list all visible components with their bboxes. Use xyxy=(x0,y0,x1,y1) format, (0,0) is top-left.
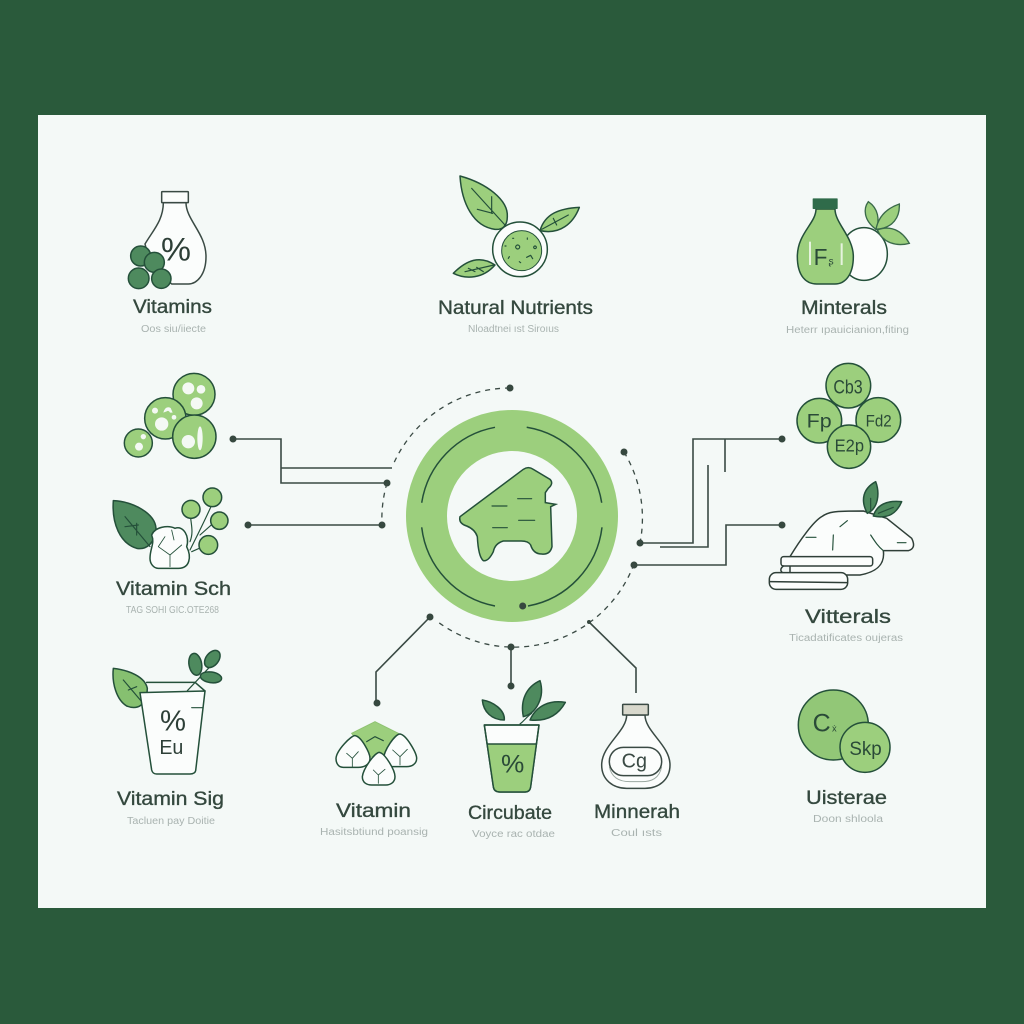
item: Vitamin Sig xyxy=(113,647,224,827)
label: Minnerah xyxy=(594,801,680,823)
right connectors xyxy=(630,436,786,568)
item: Natural Nutrients xyxy=(438,176,593,335)
label: Uisterae xyxy=(806,787,887,809)
icon: cup with leaves: Eu xyxy=(159,736,183,759)
connector network xyxy=(230,384,786,706)
icon: leaves around a circle xyxy=(453,176,579,277)
ring arcs xyxy=(422,427,602,606)
green ring xyxy=(426,430,598,602)
item: Vitterals xyxy=(769,482,914,644)
icon: green cup with plant: % xyxy=(501,751,524,779)
label: Minterals xyxy=(801,297,887,319)
item: Vitamin Sch xyxy=(113,488,231,616)
icon: green bubble cluster xyxy=(124,373,216,458)
icon: mineral circle cluster: Fd2 xyxy=(866,412,892,431)
icon: green bottle with fruit: F xyxy=(814,244,828,270)
icon: outlined bottle: Cg xyxy=(622,750,647,773)
icon: overlapping circles: C xyxy=(813,710,831,738)
icon: green bottle with fruit: ʂ xyxy=(829,256,834,267)
caption: Voyce rac otdae xyxy=(472,829,556,840)
icon: mineral circle cluster: E2p xyxy=(835,436,864,456)
caption: Oos siu/iiecte xyxy=(141,324,206,335)
icon: rock cluster xyxy=(336,722,417,785)
label: Circubate xyxy=(468,802,552,824)
label: Natural Nutrients xyxy=(438,297,593,319)
caption: Tacluen pay Doitie xyxy=(127,816,215,827)
icon: rock slabs with leaves xyxy=(769,482,914,589)
caption: Hasitsbtiund poansig xyxy=(320,827,428,838)
item: Circubate xyxy=(468,681,565,840)
item: Uisterae xyxy=(798,690,890,825)
label: Vitamin Sig xyxy=(117,788,224,810)
label: Vitamin xyxy=(336,800,411,822)
item: Vitamins xyxy=(128,192,212,335)
icon: leaf, cauliflower and sprigs xyxy=(113,488,228,568)
panel: main card xyxy=(38,115,986,908)
item: Vitamin bottom xyxy=(320,722,428,838)
icon: mineral circle cluster xyxy=(797,363,901,468)
caption: Heterr ıpauicianion,fiting xyxy=(786,325,909,336)
icon: green bottle with fruit xyxy=(797,198,909,284)
icon: mineral circle cluster: Cb3 xyxy=(833,377,863,398)
label: Vitterals xyxy=(805,606,891,628)
icon: bottle with percent and berries xyxy=(128,192,206,289)
central ring emblem xyxy=(422,427,602,610)
icon: cup with leaves xyxy=(113,647,223,774)
label: Vitamins xyxy=(133,296,212,318)
caption: Nloadtnei ıst Siroıus xyxy=(468,324,559,335)
label: Vitamin Sch xyxy=(116,578,231,600)
icon: cup with leaves: % xyxy=(160,706,186,738)
left connectors xyxy=(230,436,392,528)
item: Minerals top xyxy=(786,198,909,336)
caption: Doon shloola xyxy=(813,814,884,825)
caption: Coul ısts xyxy=(611,828,662,839)
icon: green cup with plant xyxy=(482,681,565,792)
item: Minnerah xyxy=(594,704,680,839)
bottom connectors xyxy=(374,614,636,706)
dashed orbit xyxy=(382,384,642,647)
icon: overlapping circles: ẋ xyxy=(832,724,837,734)
icon: bottle with percent and berries: % xyxy=(161,232,191,268)
icon: mineral circle cluster: Fp xyxy=(807,411,832,432)
icon: house shaped leaf xyxy=(460,468,556,561)
caption: Ticadatificates oujeras xyxy=(789,633,903,644)
caption: TAG SOHI GIC.OTE268 xyxy=(126,605,219,616)
icon: overlapping circles: Skp xyxy=(849,739,882,760)
icon: overlapping circles xyxy=(798,690,890,772)
